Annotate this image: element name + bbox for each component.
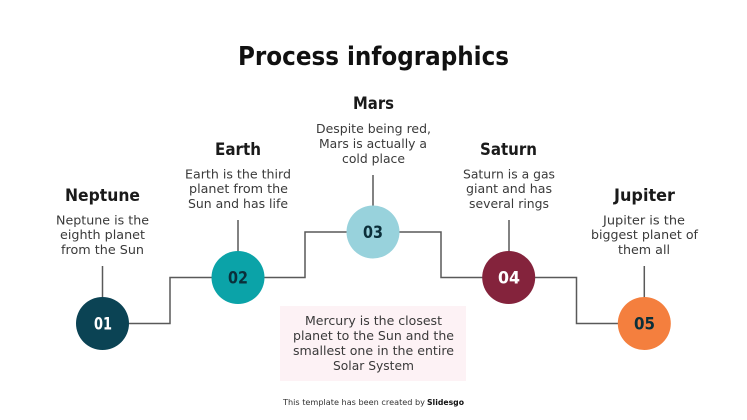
Neptune description: eighth planet xyxy=(60,227,145,242)
Mars description: Despite being red, xyxy=(316,121,431,136)
Saturn node 04 xyxy=(482,251,535,304)
Jupiter description: them all xyxy=(618,242,670,257)
Jupiter description xyxy=(591,212,699,257)
Neptune description xyxy=(56,212,149,257)
step 5: Jupiter xyxy=(591,186,699,350)
Jupiter node 05 xyxy=(618,297,671,350)
Saturn description: giant and has xyxy=(466,181,552,196)
Jupiter stem xyxy=(643,266,645,298)
callout: Mercury: Solar System xyxy=(333,358,414,373)
Earth description xyxy=(185,166,291,211)
Mars stem xyxy=(372,175,374,206)
process connector line xyxy=(102,232,644,324)
Mars node 03: 03 xyxy=(363,223,383,242)
Neptune node 01 xyxy=(76,297,129,350)
Jupiter heading: Jupiter xyxy=(613,186,676,205)
Mars heading: Mars xyxy=(353,94,394,113)
Jupiter description: Jupiter is the xyxy=(602,212,685,228)
Jupiter description: biggest planet of xyxy=(591,227,699,242)
Neptune stem xyxy=(102,266,104,298)
Earth heading: Earth xyxy=(215,140,261,159)
callout: Mercury: planet to the Sun and the xyxy=(293,328,454,343)
callout: Mercury: Mercury is the closest xyxy=(305,313,442,328)
Neptune description: from the Sun xyxy=(61,242,144,257)
Saturn description xyxy=(463,166,555,211)
Earth node 02: 02 xyxy=(228,268,248,288)
Earth description: Earth is the third xyxy=(185,166,291,182)
Saturn description: Saturn is a gas xyxy=(463,166,555,182)
footer credit: This template has been created by xyxy=(282,398,426,407)
Jupiter node 05: 05 xyxy=(634,314,655,334)
Mars node 03 xyxy=(346,206,400,258)
title: Process infographics xyxy=(238,42,509,72)
Saturn heading: Saturn xyxy=(480,140,537,159)
Mars description: Mars is actually a xyxy=(319,136,427,151)
Saturn node 04: 04 xyxy=(498,268,520,288)
Mars description xyxy=(316,121,431,166)
Saturn stem xyxy=(508,220,510,252)
Earth stem xyxy=(237,220,239,252)
step 3: Mars xyxy=(316,94,431,258)
footer credit: Slidesgo xyxy=(427,398,464,407)
Neptune description: Neptune is the xyxy=(56,212,149,228)
Mars description: cold place xyxy=(342,151,405,166)
Neptune node 01: 01 xyxy=(94,314,112,334)
callout: Mercury: smallest one in the entire xyxy=(293,343,454,358)
Earth node 02 xyxy=(212,251,264,304)
Neptune heading: Neptune xyxy=(65,186,140,205)
callout: Mercury xyxy=(280,306,466,381)
step 1: Neptune xyxy=(56,186,149,350)
Earth description: planet from the xyxy=(189,181,288,196)
Earth description: Sun and has life xyxy=(188,196,288,211)
step 2: Earth xyxy=(185,140,291,304)
Saturn description: several rings xyxy=(469,196,549,211)
step 4: Saturn xyxy=(463,140,555,304)
